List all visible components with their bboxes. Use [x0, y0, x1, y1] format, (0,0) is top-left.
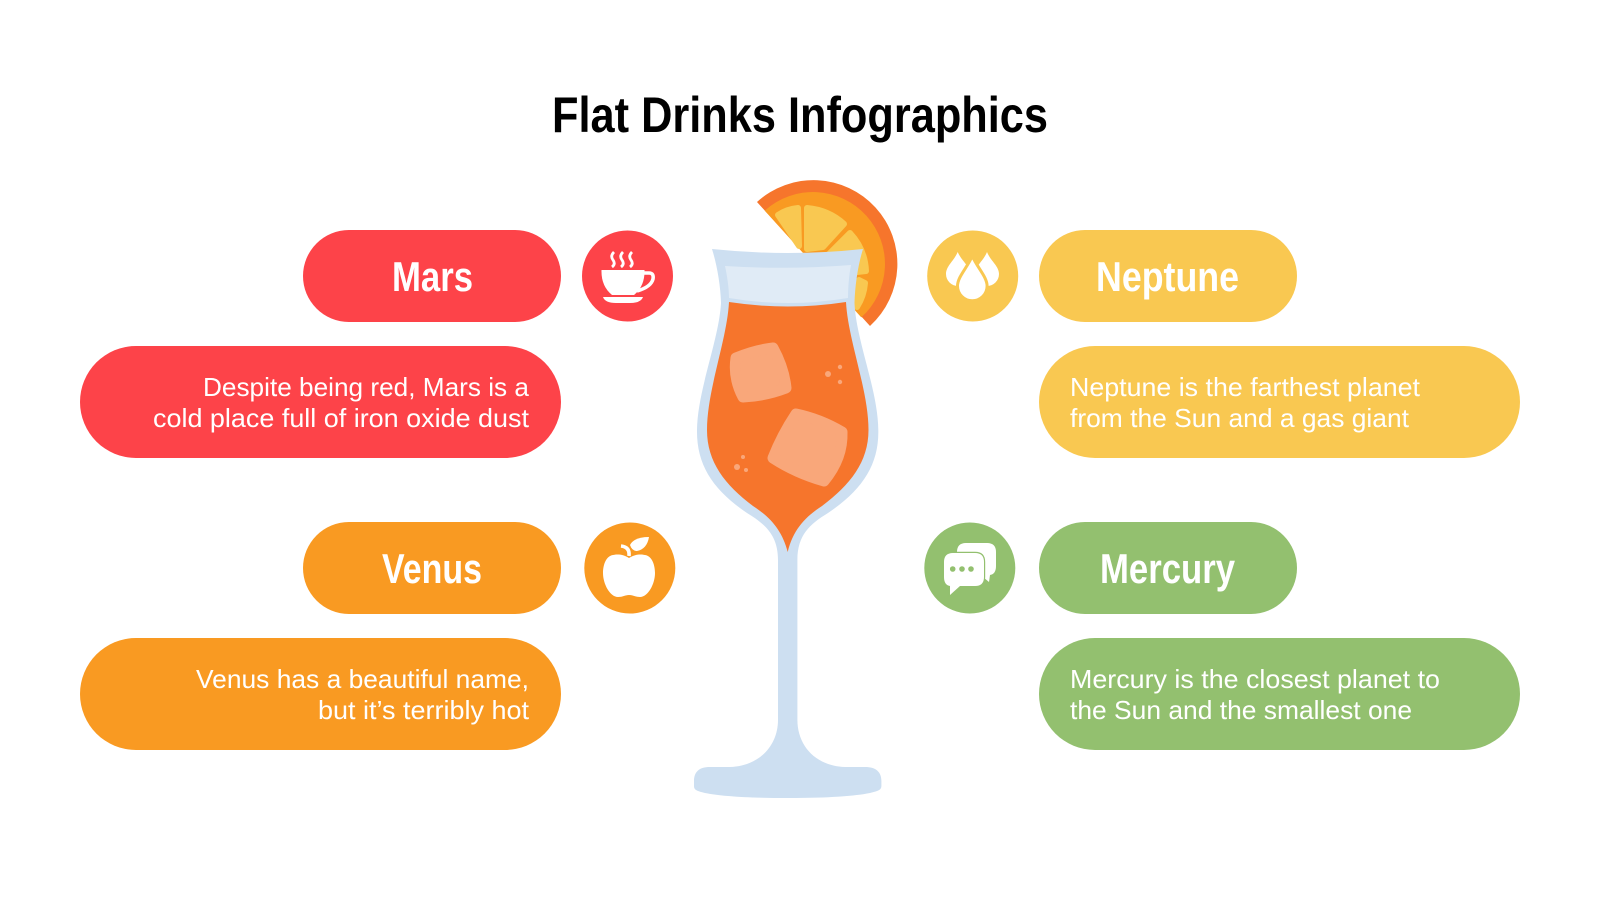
Neptune heading pill: Neptune	[1096, 253, 1239, 300]
Mars description: cold place full of iron oxide dust	[153, 403, 530, 433]
Venus description	[80, 638, 561, 750]
liquid	[707, 302, 868, 552]
bubbles	[734, 365, 842, 472]
Mercury description: the Sun and the smallest one	[1070, 695, 1412, 725]
Mars heading pill	[303, 230, 561, 322]
title: Flat Drinks Infographics	[552, 87, 1048, 143]
Mercury heading pill	[1039, 522, 1297, 614]
panel: Mars	[80, 230, 673, 458]
Mars heading pill: Mars	[392, 253, 473, 300]
Venus heading pill: Venus	[382, 545, 482, 592]
orange slice	[757, 180, 897, 326]
Mercury description: Mercury is the closest planet to	[1070, 664, 1440, 694]
Neptune description: from the Sun and a gas giant	[1070, 403, 1410, 433]
icon: chat bubbles	[924, 522, 1015, 614]
Neptune description	[1039, 346, 1520, 458]
icon: water drops	[927, 230, 1018, 322]
Mars description: Despite being red, Mars is a	[203, 372, 530, 402]
panel: Mercury	[924, 522, 1520, 750]
Mars description	[80, 346, 561, 458]
Neptune heading pill	[1039, 230, 1297, 322]
Mercury heading pill: Mercury	[1100, 545, 1236, 592]
glass body	[694, 249, 881, 798]
icon: apple	[584, 522, 675, 614]
Venus description: Venus has a beautiful name,	[196, 664, 529, 694]
icon: coffee cup	[582, 230, 673, 322]
illustration: cocktail glass	[694, 180, 897, 798]
ice cube 1	[735, 348, 786, 397]
glass rim highlight	[725, 265, 851, 303]
Neptune description: Neptune is the farthest planet	[1070, 372, 1421, 402]
Venus heading pill	[303, 522, 561, 614]
panel: Venus	[80, 522, 675, 750]
ice cube 2	[773, 414, 842, 481]
Mercury description	[1039, 638, 1520, 750]
Venus description: but it’s terribly hot	[318, 695, 530, 725]
panel: Neptune	[927, 230, 1520, 458]
